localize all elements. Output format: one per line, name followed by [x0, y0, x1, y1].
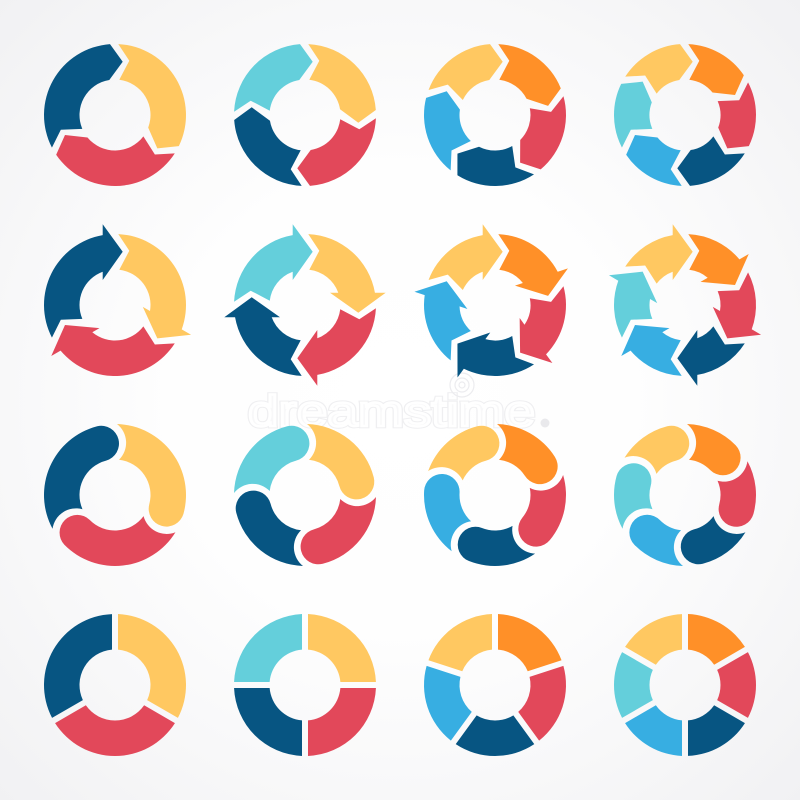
- segment: navy: [234, 688, 302, 756]
- segment: navy: [234, 107, 302, 186]
- segment: red: [301, 497, 376, 564]
- segment: yellow: [307, 424, 374, 499]
- segment: orange: [497, 424, 558, 484]
- segment: navy: [673, 128, 745, 201]
- segment: sky blue: [399, 657, 484, 741]
- row 1, donut: five notched segments: [400, 30, 583, 211]
- segment: yellow: [118, 614, 186, 718]
- segment: yellow: [428, 413, 504, 490]
- segment: cyan: [234, 44, 313, 112]
- segment: sky blue: [629, 515, 683, 566]
- row 3, donut: six rounded segments: [596, 411, 774, 579]
- segment: cyan: [594, 74, 666, 148]
- row 1, donut: six notched segments: [594, 29, 776, 201]
- segment: orange: [498, 44, 561, 106]
- arrow: navy: [16, 222, 142, 338]
- arrow: orange: [688, 234, 749, 285]
- arrow: navy: [670, 318, 745, 396]
- segment: red: [51, 101, 175, 212]
- arrow: red: [297, 308, 376, 386]
- segment: navy: [451, 505, 535, 589]
- row 2, cycle: five arrows: [394, 214, 585, 405]
- arrow: yellow: [118, 234, 191, 338]
- arrow: yellow: [308, 234, 386, 313]
- segment: yellow: [428, 600, 502, 678]
- row 3, donut: four rounded segments: [234, 424, 376, 566]
- arrow: red: [704, 272, 778, 350]
- segment: orange: [688, 44, 744, 95]
- segment: yellow: [118, 44, 186, 148]
- arrow: yellow: [625, 214, 700, 292]
- segment: navy: [674, 507, 745, 579]
- segment: red: [704, 652, 776, 727]
- arrow: sky blue: [394, 270, 487, 360]
- segment: yellow: [625, 598, 697, 672]
- segment: red: [509, 666, 583, 744]
- row 2, cycle: six arrows: [592, 214, 778, 396]
- arrow: cyan: [234, 224, 313, 302]
- segment: yellow: [625, 411, 696, 483]
- watermark: dreamstime: [248, 387, 535, 436]
- segment: red: [297, 118, 376, 186]
- segment: red: [505, 96, 583, 175]
- segment: navy: [449, 698, 534, 782]
- arrow: red: [505, 286, 585, 372]
- segment: sky blue: [625, 705, 682, 756]
- segment: yellow: [429, 30, 507, 109]
- segment: cyan: [234, 614, 302, 682]
- segment: navy: [447, 124, 534, 211]
- segment: yellow: [308, 614, 376, 682]
- segment: orange: [687, 424, 741, 475]
- watermark: dreamstime: [248, 387, 535, 436]
- segment: cyan: [234, 426, 309, 493]
- row 4, donut: three flat segments: [18, 607, 186, 782]
- segment: cyan: [596, 457, 667, 529]
- segment: cyan: [594, 643, 666, 718]
- segment: red: [704, 82, 776, 156]
- segment: navy: [673, 698, 745, 772]
- watermark: [248, 373, 550, 436]
- segment: yellow: [625, 29, 697, 102]
- segment: red: [308, 688, 376, 756]
- segment: red: [703, 461, 774, 533]
- row 1, donut: three notched segments: [18, 37, 186, 212]
- segment: orange: [498, 614, 562, 671]
- segment: sky blue: [403, 467, 487, 551]
- row 3, donut: five rounded segments: [403, 413, 582, 589]
- segment: sky blue: [400, 84, 487, 170]
- segment: red: [506, 475, 582, 551]
- row 2, cycle: four arrows: [224, 224, 386, 386]
- arrow: cyan: [592, 260, 666, 338]
- segment: yellow: [308, 44, 376, 123]
- segment: sky blue: [626, 135, 682, 186]
- row 4, donut: six flat segments: [594, 598, 776, 772]
- arrow: orange: [498, 234, 568, 296]
- row 2, cycle: three arrows: [16, 222, 191, 406]
- row 1, donut: four notched segments: [234, 44, 376, 186]
- segment: navy: [236, 491, 303, 566]
- arrow: red: [48, 291, 175, 406]
- segment: navy: [18, 607, 142, 718]
- row 3, donut: three rounded segments: [18, 418, 186, 592]
- segment: orange: [688, 614, 745, 665]
- arrow: yellow: [429, 214, 509, 299]
- arrow: navy: [441, 314, 534, 405]
- segment: yellow: [117, 424, 186, 527]
- row 4, donut: four flat segments: [234, 614, 376, 756]
- row 4, donut: five flat segments: [399, 600, 583, 782]
- segment: navy: [18, 37, 142, 148]
- segment: navy: [18, 418, 141, 529]
- arrow: sky blue: [621, 325, 682, 376]
- arrow: navy: [224, 297, 302, 376]
- segment: red: [52, 481, 175, 592]
- segment: red: [51, 671, 175, 782]
